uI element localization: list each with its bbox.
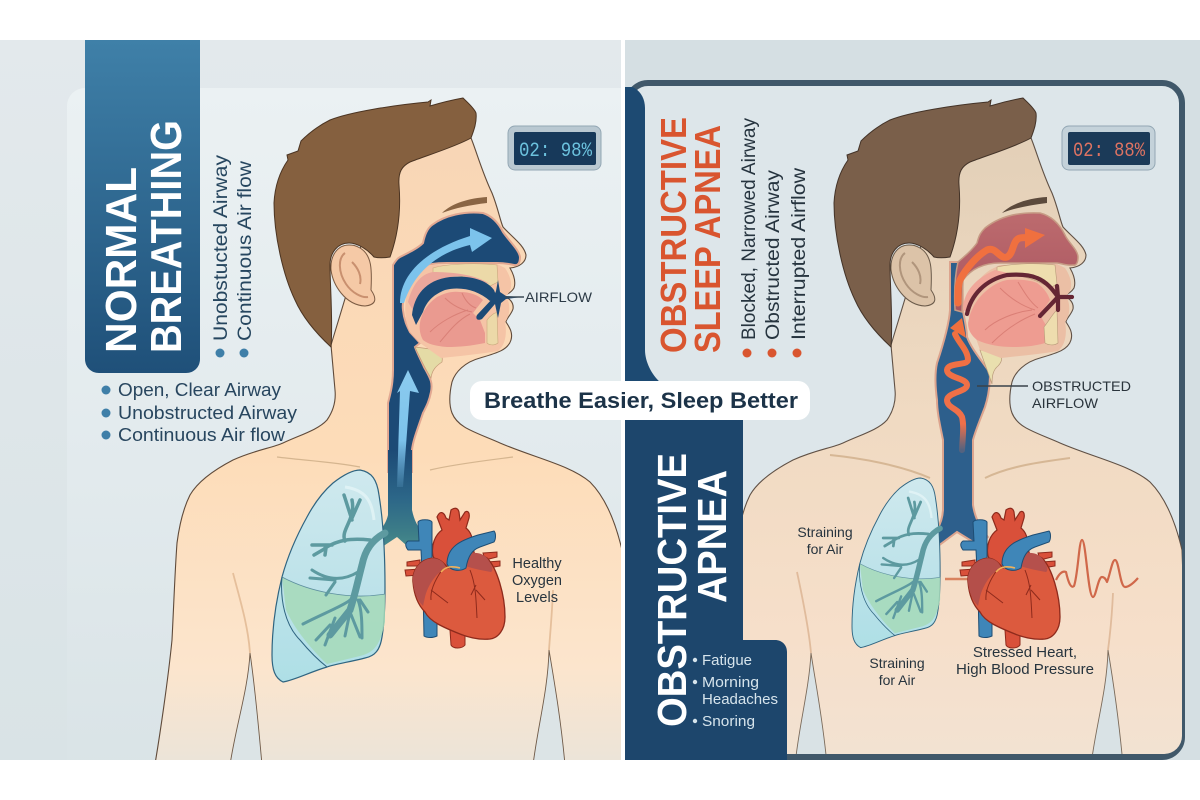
throat tissue <box>415 347 442 378</box>
jaw <box>1044 310 1058 345</box>
tagline pill <box>470 381 810 420</box>
navy strip upper left <box>625 87 660 382</box>
tongue <box>420 292 485 347</box>
fatigue: Fatigue <box>702 652 752 669</box>
symptoms list: Headaches <box>702 691 778 708</box>
mouth star <box>476 280 522 320</box>
hair <box>274 98 476 347</box>
heading: obstructive sleep apnea <box>653 117 728 353</box>
eyebrow <box>442 197 487 213</box>
label: straining upper <box>797 524 853 557</box>
tongue striations <box>430 293 476 342</box>
item 3: Continuous Air flow <box>118 425 286 445</box>
arm creases <box>233 573 553 653</box>
panel: obstructive sleep apnea <box>625 40 1200 770</box>
hard palate <box>433 264 498 286</box>
right panel background <box>625 40 1200 760</box>
item 1: Open, Clear Airway <box>118 380 281 400</box>
outer bezel <box>508 126 601 170</box>
vertical bullet list: apnea <box>739 118 810 358</box>
label: stressed heart: Stressed Heart, <box>973 644 1077 661</box>
airflow label <box>505 289 593 305</box>
right frame <box>628 83 1182 757</box>
leader line <box>977 385 1028 387</box>
banner: obstructive apnea <box>625 420 787 760</box>
vertical bullet list: normal <box>211 154 256 358</box>
label: straining upper: Straining <box>797 524 853 540</box>
display <box>514 132 596 165</box>
throat tissue <box>980 350 1002 384</box>
throat blue narrowed <box>934 261 991 546</box>
lung <box>852 478 940 648</box>
right panel illustration <box>714 98 1190 770</box>
label text: AIRFLOW <box>525 289 593 305</box>
heading: obstructive apnea: APNEA <box>689 470 735 603</box>
title banner: normal breathing <box>85 40 200 373</box>
pill background <box>470 381 810 420</box>
ecg trace <box>1056 540 1138 597</box>
label: stressed heart <box>956 644 1094 678</box>
bullets <box>693 658 697 723</box>
item 1: Unobstucted Airway <box>211 154 232 341</box>
label: healthy oxygen levels: Levels <box>516 590 558 606</box>
symptoms list <box>693 652 778 730</box>
airflow arrow lower <box>397 370 419 487</box>
label: straining lower <box>869 655 925 688</box>
item 3: Interrupted Airflow <box>789 168 810 340</box>
lung <box>272 470 385 682</box>
morning headaches: Morning <box>702 674 759 691</box>
collar creases <box>830 455 1070 478</box>
bullets <box>742 348 802 358</box>
value: 02: 88% <box>1073 140 1146 163</box>
constricted passage <box>967 275 1072 316</box>
label: healthy oxygen levels: Oxygen <box>512 573 562 589</box>
mouth air passage <box>412 277 497 325</box>
item 1: Blocked, Narrowed Airway <box>739 118 760 340</box>
label: healthy oxygen levels: Healthy <box>512 556 562 572</box>
ear <box>331 245 375 306</box>
label: obstructed airflow: AIRFLOW <box>1032 395 1099 411</box>
value: 02: 98% <box>519 140 593 163</box>
label: straining upper: for Air <box>807 541 844 557</box>
arrowhead lower <box>950 318 966 338</box>
divider <box>621 40 625 760</box>
arm creases <box>797 572 1113 653</box>
heart <box>405 508 505 648</box>
item 2: Obstructed Airway <box>763 169 784 340</box>
item 2: Unobstructed Airway <box>118 403 297 423</box>
torso and head skin <box>743 138 1182 754</box>
label text: OBSTRUCTED <box>1032 378 1131 394</box>
oral tissue <box>405 264 511 358</box>
leader line <box>505 296 524 298</box>
oxygen readout: apnea <box>1062 126 1155 170</box>
airway: nasal cavity and throat <box>388 212 520 472</box>
enlarged tongue <box>968 280 1050 347</box>
wavy airflow arrow upper <box>958 238 1030 303</box>
trachea lower and fork <box>383 450 418 546</box>
label: stressed heart: High Blood Pressure <box>956 661 1094 678</box>
soft palate <box>963 270 1008 312</box>
label: straining lower: for Air <box>879 672 916 688</box>
collar creases <box>277 457 513 470</box>
ecg stub <box>945 578 972 580</box>
oral tissue <box>967 264 1071 358</box>
display <box>1068 132 1150 165</box>
label: healthy oxygen levels <box>512 556 562 606</box>
label: obstructed airflow <box>977 378 1131 411</box>
heading: breathing: BREATHING <box>142 120 191 353</box>
eyebrow <box>1002 197 1047 213</box>
bullet list: normal <box>102 380 297 445</box>
bullets <box>216 348 248 358</box>
soft palate <box>408 272 490 312</box>
heading: obstructive sleep apnea: OBSTRUCTIVE <box>653 117 694 353</box>
label: straining lower: Straining <box>869 655 925 671</box>
oxygen readout: normal <box>508 126 601 170</box>
hard palate <box>997 264 1057 288</box>
outer bezel <box>1062 126 1155 170</box>
banner background <box>85 40 200 373</box>
heading: obstructive apnea: OBSTRUCTIVE <box>649 453 695 727</box>
tongue striations <box>985 282 1038 343</box>
torso and head skin <box>154 138 630 770</box>
bullets <box>102 386 110 440</box>
ear <box>891 245 935 306</box>
heading: obstructive apnea <box>649 453 735 727</box>
airflow arrow upper <box>400 228 492 303</box>
arrowhead upper <box>1025 228 1045 248</box>
left panel background <box>0 40 621 760</box>
heading: obstructive sleep apnea: SLEEP APNEA <box>687 125 728 353</box>
hair <box>834 98 1036 347</box>
heart <box>960 508 1060 648</box>
wavy airflow arrow lower <box>947 334 968 450</box>
panel: normal breathing <box>0 40 647 788</box>
snoring: Snoring <box>702 713 755 730</box>
heading: normal: NORMAL <box>97 167 146 353</box>
item 2: Continuous Air flow <box>235 161 256 341</box>
tagline text: Breathe Easier, Sleep Better <box>484 388 798 413</box>
nasal cavity inflamed <box>955 213 1078 312</box>
arm gaps <box>230 650 565 765</box>
left inner lighter card <box>67 88 621 157</box>
jaw <box>487 313 498 345</box>
arm gaps <box>795 650 1123 765</box>
